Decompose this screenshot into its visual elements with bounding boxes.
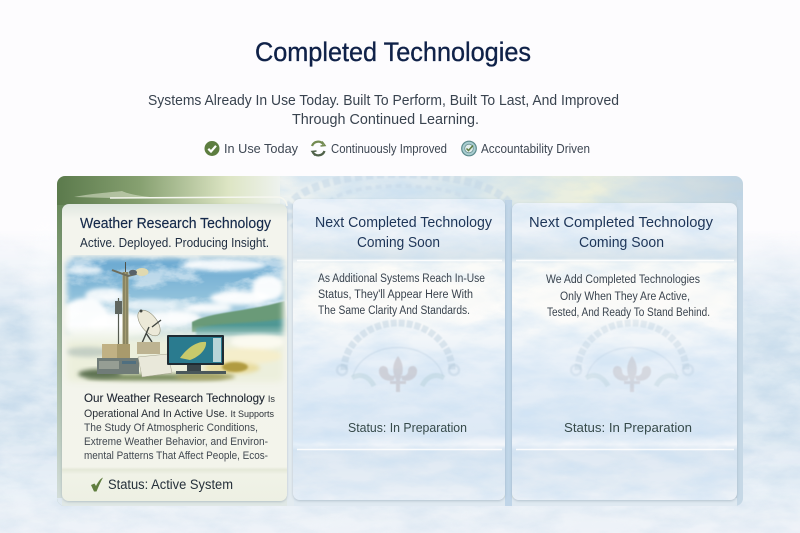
card body text: mental Patterns That Affect People, Ecos- bbox=[84, 450, 268, 462]
subtitle: Systems Already In Use Today. Built To Perform, Built To Last, And Improved bbox=[148, 93, 619, 109]
card subheading: Active. Deployed. Producing Insight. bbox=[80, 236, 269, 250]
emblem: fleur-de-lis watermark bbox=[337, 323, 459, 392]
card body text: The Study Of Atmospheric Conditions, bbox=[84, 422, 258, 434]
emblem: fleur-de-lis watermark bbox=[571, 323, 693, 392]
card: next completed technology, first placeholder bbox=[293, 199, 505, 500]
ground bbox=[78, 362, 248, 382]
title: Completed Technologies bbox=[255, 37, 531, 67]
card body text: Operational And In Active Use. It Supports bbox=[84, 408, 274, 420]
card heading: Next Completed Technology bbox=[529, 214, 713, 231]
hills bbox=[192, 301, 288, 332]
panel: outer container bbox=[57, 174, 743, 506]
legend bbox=[204, 141, 590, 156]
dish bbox=[138, 310, 162, 342]
card body text: Status, They'll Appear Here With bbox=[318, 289, 473, 301]
legend label: accountability driven: Accountability Driven bbox=[481, 142, 590, 156]
card body text: We Add Completed Technologies bbox=[546, 274, 700, 286]
monitor bbox=[167, 335, 226, 374]
mast and anemometer bbox=[112, 262, 148, 345]
icon: check mark bbox=[91, 478, 103, 492]
card heading bbox=[315, 214, 492, 251]
card heading: Coming Soon bbox=[579, 234, 664, 251]
card: weather research technology bbox=[60, 197, 288, 501]
equipment boxes bbox=[97, 342, 160, 374]
icon: green check badge bbox=[204, 141, 220, 156]
illustration: weather station in landscape bbox=[62, 255, 287, 384]
card: next completed technology, second placeholder bbox=[512, 203, 737, 500]
card body text bbox=[84, 391, 275, 462]
card body text: As Additional Systems Reach In-Use bbox=[318, 273, 485, 285]
legend label: in use today: In Use Today bbox=[224, 141, 298, 156]
status: in preparation: Status: In Preparation bbox=[348, 420, 467, 435]
card heading: Coming Soon bbox=[357, 234, 440, 251]
status: in preparation: Status: In Preparation bbox=[564, 420, 692, 435]
card body text: Extreme Weather Behavior, and Environ- bbox=[84, 436, 268, 448]
icon: circular arrows bbox=[312, 142, 325, 156]
subtitle: Through Continued Learning. bbox=[292, 112, 479, 128]
card body text: Tested, And Ready To Stand Behind. bbox=[547, 307, 710, 319]
card body text bbox=[546, 274, 710, 319]
status: active system: Status: Active System bbox=[108, 477, 233, 492]
card body text: Only When They Are Active, bbox=[560, 291, 690, 303]
icon: accountability seal bbox=[462, 141, 476, 156]
subtitle bbox=[148, 93, 619, 128]
card body text bbox=[318, 273, 485, 317]
card heading: Next Completed Technology bbox=[315, 214, 492, 231]
card heading bbox=[529, 214, 713, 251]
card heading: Weather Research Technology bbox=[80, 215, 271, 232]
clipboard bbox=[138, 354, 172, 377]
clouds bbox=[60, 259, 284, 347]
page background bbox=[0, 240, 800, 533]
card body text: Our Weather Research Technology Is bbox=[84, 391, 275, 405]
card body text: The Same Clarity And Standards. bbox=[318, 305, 470, 317]
legend label: continuously improved: Continuously Improved bbox=[331, 142, 447, 156]
